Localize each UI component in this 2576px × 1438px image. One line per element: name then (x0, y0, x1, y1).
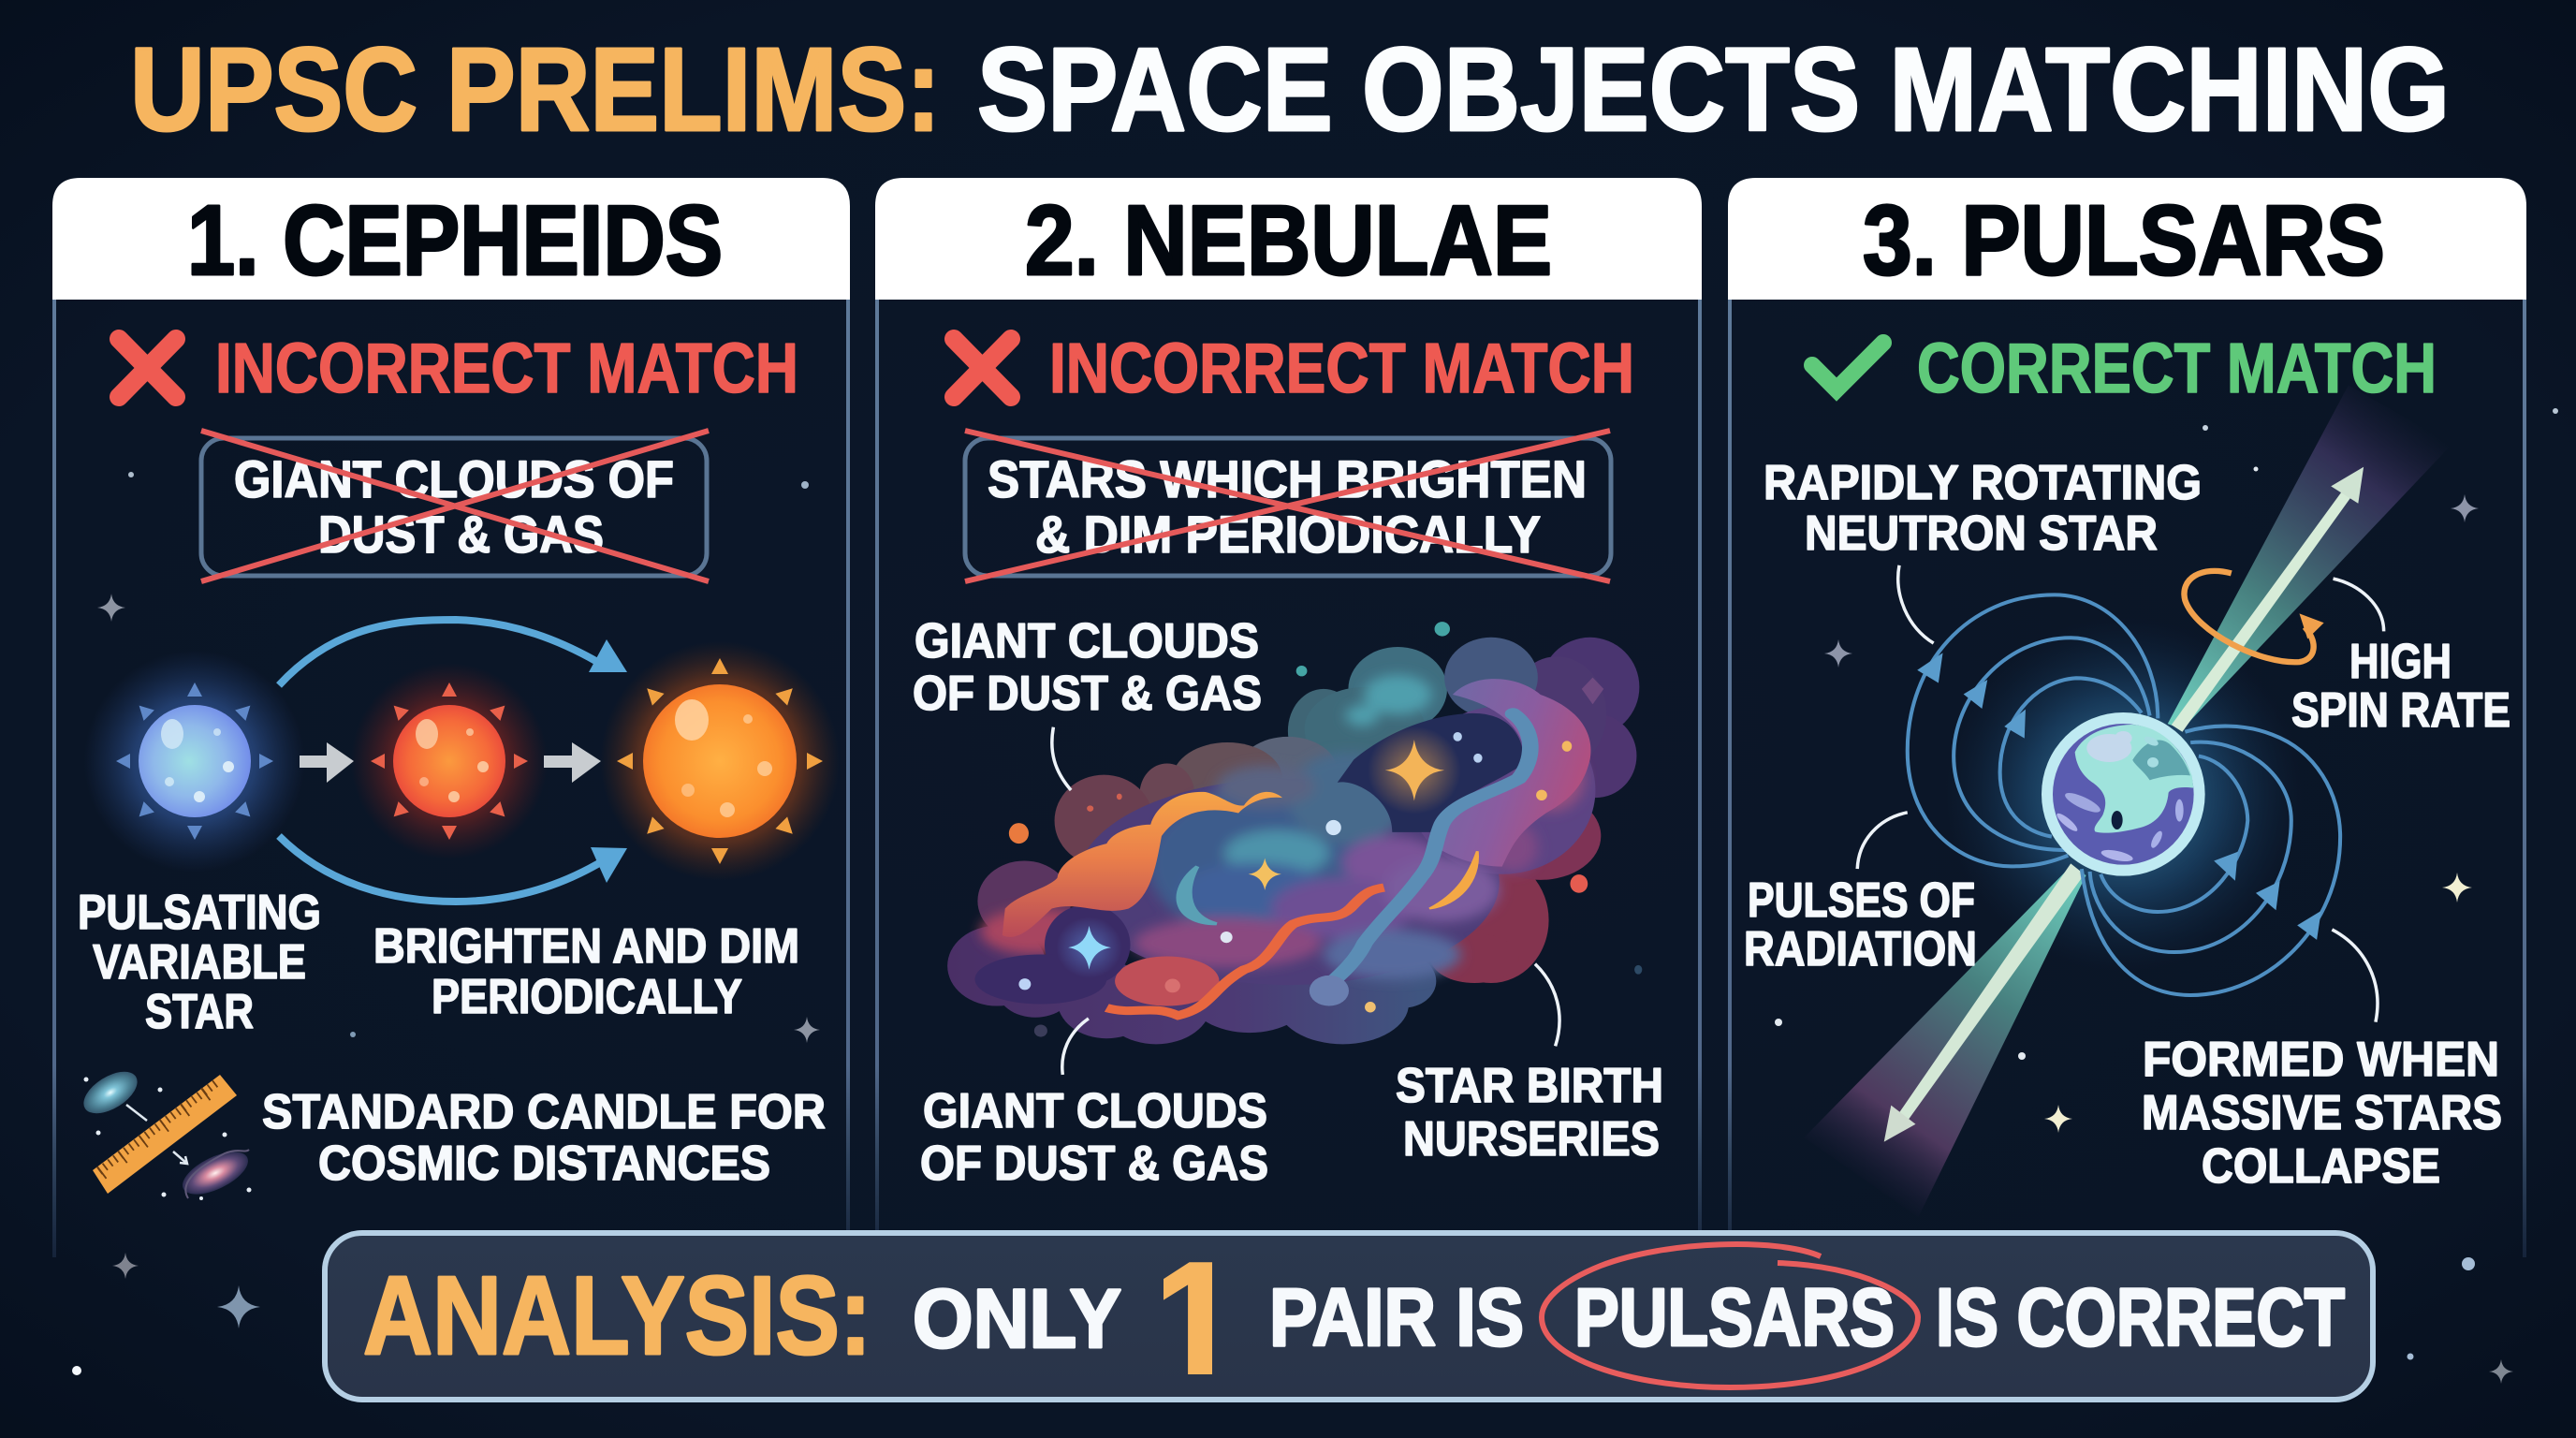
panel: cepheids (52, 178, 850, 1257)
label: formed when massive stars collapse: COLLAPSE (2202, 1139, 2440, 1194)
crossed out definition box: & DIM PERIODICALLY (1035, 505, 1541, 564)
label: giant clouds bottom: GIANT CLOUDS (923, 1084, 1267, 1138)
crossed out definition box (201, 431, 709, 581)
label: rapidly rotating neutron star: RAPIDLY ROTATING (1764, 456, 2202, 510)
icon: red star (351, 663, 548, 859)
cepheids header: 1. CEPHEIDS (187, 185, 723, 296)
label: giant clouds bottom (920, 1084, 1268, 1191)
label: giant clouds top: OF DUST & GAS (913, 667, 1262, 721)
icon: red cross (954, 339, 1011, 397)
crossed out definition box: DUST & GAS (318, 505, 604, 564)
label: pulsating variable star: PULSATING (78, 886, 321, 940)
label: standard candle for cosmic distances (262, 1085, 826, 1191)
label: giant clouds top: GIANT CLOUDS (915, 614, 1259, 668)
crossed out definition box: STARS WHICH BRIGHTEN (988, 449, 1587, 508)
nebulae header: 2. NEBULAE (1025, 185, 1552, 296)
callout leader lines (1052, 727, 1559, 1075)
verdict: correct match: CORRECT MATCH (1917, 329, 2437, 407)
label: high spin rate: SPIN RATE (2291, 683, 2510, 738)
label: rapidly rotating neutron star (1764, 456, 2202, 561)
label: standard candle for cosmic distances: COSMIC DISTANCES (318, 1137, 770, 1191)
crossed out definition box: GIANT CLOUDS OF (234, 449, 674, 508)
label: star birth nurseries (1396, 1059, 1663, 1167)
label: brighten and dim periodically: PERIODICALLY (432, 970, 742, 1024)
analysis label: ANALYSIS: (363, 1254, 871, 1378)
icon: red cross (119, 339, 176, 397)
illustration: nebula cloud (947, 622, 1642, 1044)
text: only: ONLY (913, 1271, 1121, 1365)
text: pair is: PAIR IS (1269, 1272, 1524, 1363)
background stars (72, 408, 2558, 1384)
title: SPACE OBJECTS MATCHING (977, 23, 2450, 155)
analysis banner (322, 1230, 2376, 1402)
title: UPSC PRELIMS: (130, 23, 941, 155)
label: star birth nurseries: NURSERIES (1403, 1112, 1660, 1167)
label: pulsating variable star (78, 886, 321, 1039)
panel: pulsars (1728, 178, 2526, 1257)
label: formed when massive stars collapse: MASSIVE STARS (2142, 1086, 2502, 1140)
nebulae header (875, 178, 1702, 300)
arrow: lower arc (279, 836, 627, 902)
label: formed when massive stars collapse: FORMED WHEN (2143, 1033, 2499, 1087)
title (130, 23, 2450, 155)
label: giant clouds top (913, 614, 1262, 721)
arrow: small step 1 (300, 742, 354, 783)
verdict: incorrect match: INCORRECT MATCH (1049, 329, 1634, 407)
illustration: pulsar (1804, 385, 2452, 1217)
label: brighten and dim periodically (373, 919, 799, 1024)
pulsars header: 3. PULSARS (1863, 185, 2385, 296)
label: brighten and dim periodically: BRIGHTEN AND DIM (373, 919, 799, 974)
label: star birth nurseries: STAR BIRTH (1396, 1059, 1663, 1113)
crossed out definition box (965, 431, 1611, 581)
label: high spin rate (2291, 635, 2510, 738)
icon: blue star (84, 651, 305, 872)
panel: nebulae (875, 178, 1702, 1257)
text: is correct: IS CORRECT (1936, 1272, 2345, 1363)
pulsars header (1728, 178, 2526, 300)
label: pulsating variable star: STAR (145, 985, 254, 1039)
label: pulses of radiation: RADIATION (1744, 922, 1977, 976)
text: pulsars: PULSARS (1574, 1272, 1895, 1363)
arrow: small step 2 (544, 742, 601, 783)
big number one: 1 (1143, 1221, 1251, 1436)
label: pulsating variable star: VARIABLE (93, 935, 306, 990)
icon: orange star (600, 641, 840, 881)
label: pulses of radiation: PULSES OF (1748, 873, 1975, 928)
label: standard candle for cosmic distances: STANDARD CANDLE FOR (262, 1085, 826, 1139)
icon: ruler and galaxies (77, 1064, 255, 1203)
label: high spin rate: HIGH (2349, 635, 2452, 689)
label: formed when massive stars collapse (2142, 1033, 2502, 1194)
verdict: incorrect match: INCORRECT MATCH (215, 329, 798, 407)
label: giant clouds bottom: OF DUST & GAS (920, 1137, 1268, 1191)
icon: neutron star (2042, 712, 2205, 876)
red hand-drawn circle (1542, 1244, 1918, 1387)
icon: green check (1812, 343, 1883, 389)
label: rapidly rotating neutron star: NEUTRON STAR (1805, 506, 2158, 561)
label: pulses of radiation (1744, 873, 1977, 976)
callout leader lines (1857, 565, 2384, 1022)
arrow: upper arc (279, 620, 627, 685)
